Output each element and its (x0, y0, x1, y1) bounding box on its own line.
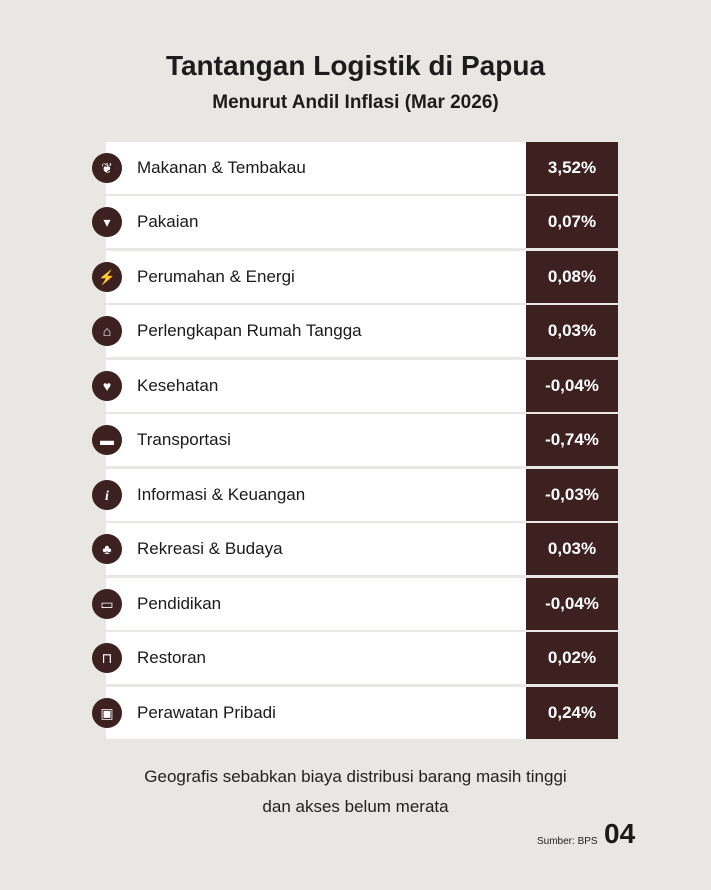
row: Perawatan: ▣ (100, 705, 114, 721)
row: Kesehatan: ♥ (103, 378, 111, 394)
row: Perlengkapan: 0,03% (548, 321, 596, 340)
row: Perlengkapan (106, 305, 618, 357)
row: Rekreasi: ♣ (102, 541, 112, 557)
row: Rekreasi (106, 523, 618, 575)
row: Kesehatan: Kesehatan (137, 376, 218, 395)
row: Perumahan (106, 251, 618, 303)
caption (144, 767, 567, 816)
row: Pendidikan: Pendidikan (137, 594, 221, 613)
row: Informasi: Informasi & Keuangan (137, 485, 305, 504)
row: Pakaian (106, 196, 618, 248)
row: Restoran: 0,02% (548, 648, 596, 667)
source: Sumber: BPS (537, 836, 598, 847)
row: Kesehatan (106, 360, 618, 412)
row: Makanan: 3,52% (548, 158, 596, 177)
subtitle: Menurut Andil Inflasi (Mar 2026) (212, 92, 499, 113)
row: Makanan: Makanan & Tembakau (137, 158, 306, 177)
caption: Geografis sebabkan biaya distribusi barang masih tinggi (144, 767, 567, 786)
row: Perawatan: Perawatan Pribadi (137, 703, 276, 722)
row: Pendidikan: ▭ (100, 596, 114, 612)
row: Pendidikan: -0,04% (545, 594, 599, 613)
row: Makanan (106, 142, 618, 194)
row: Makanan: ❦ (101, 160, 113, 176)
row: Kesehatan: -0,04% (545, 376, 599, 395)
row: Perumahan: ⚡ (98, 269, 116, 285)
row: Rekreasi: Rekreasi & Budaya (137, 539, 283, 558)
row: Transportasi: Transportasi (137, 430, 231, 449)
row: Pakaian: Pakaian (137, 212, 198, 231)
title: Tantangan Logistik di Papua (166, 50, 545, 81)
row: Perawatan (106, 687, 618, 739)
row: Pendidikan (106, 578, 618, 630)
row: Perlengkapan: ⌂ (103, 323, 111, 339)
row: Perawatan: 0,24% (548, 703, 596, 722)
row: Transportasi (106, 414, 618, 466)
row: Transportasi: -0,74% (545, 430, 599, 449)
row: Transportasi: ▬ (100, 432, 114, 448)
row: Rekreasi: 0,03% (548, 539, 596, 558)
row: Informasi: i (105, 489, 109, 504)
page number: 04 (604, 818, 635, 849)
row: Pakaian: 0,07% (548, 212, 596, 231)
row: Informasi: -0,03% (545, 485, 599, 504)
row: Pakaian: ▾ (103, 214, 111, 230)
caption: dan akses belum merata (262, 797, 449, 816)
row: Restoran: Restoran (137, 648, 206, 667)
row: Restoran (106, 632, 618, 684)
row: Restoran: ⊓ (102, 650, 112, 666)
row: Perumahan: Perumahan & Energi (137, 267, 295, 286)
row: Perlengkapan: Perlengkapan Rumah Tangga (137, 321, 362, 340)
row: Perumahan: 0,08% (548, 267, 596, 286)
row: Informasi (106, 469, 618, 521)
